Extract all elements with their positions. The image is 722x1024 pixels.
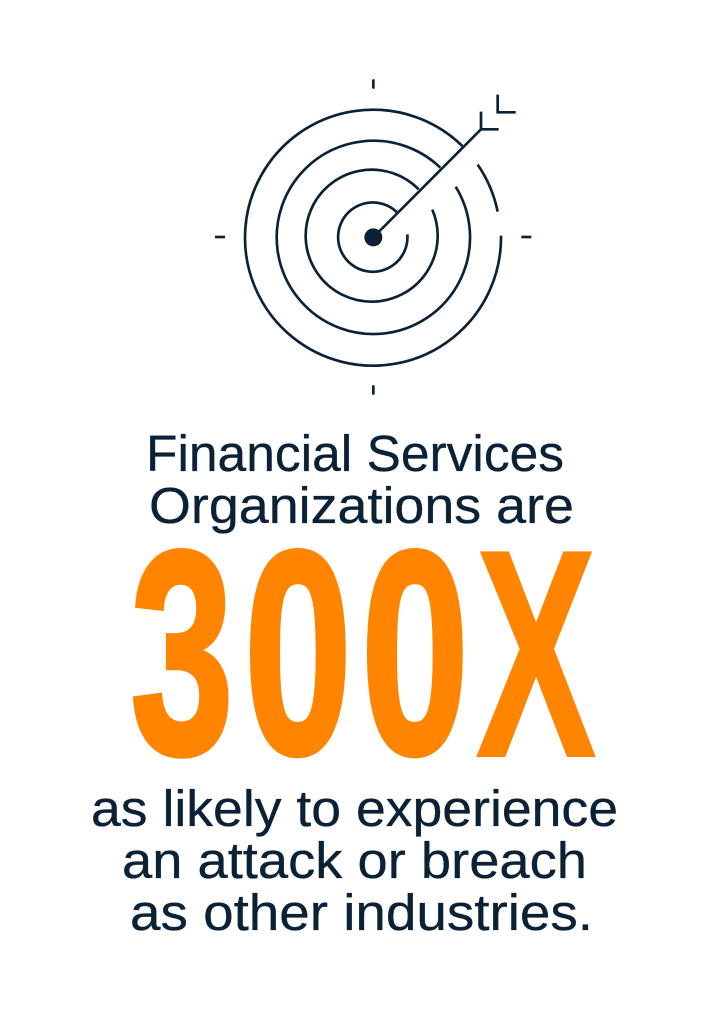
closing text: as other industries. (130, 884, 593, 941)
big number: 300X: X (476, 488, 596, 819)
arrow (378, 95, 516, 232)
heading text: Financial Services (146, 425, 564, 482)
closing text: as likely to experience (91, 780, 618, 837)
closing text (91, 780, 618, 941)
big number: 300X: 0 (361, 492, 469, 815)
big number: 300X (130, 488, 596, 819)
heading text: Organizations are (149, 477, 574, 534)
target rings (245, 110, 501, 366)
icon: target with arrow (215, 79, 531, 395)
crosshair ticks (215, 79, 531, 395)
closing text: an attack or breach (122, 832, 587, 889)
bullseye dot (364, 228, 382, 246)
big number: 300X: 3 (130, 491, 234, 815)
heading text (146, 425, 574, 534)
big number: 300X: 0 (244, 492, 352, 815)
